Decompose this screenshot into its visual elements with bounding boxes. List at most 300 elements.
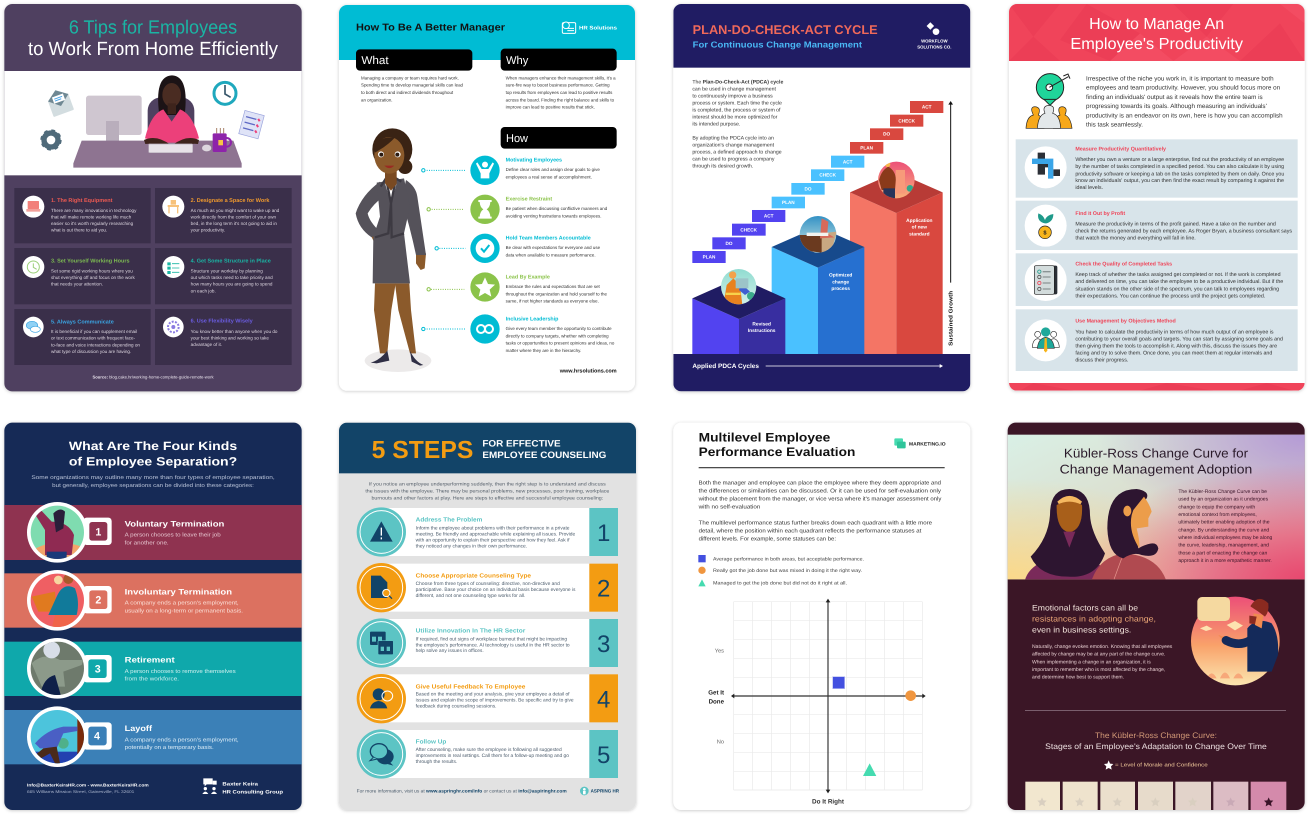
- step 2: participative. Base your choice on an individual basis because everyone is: [416, 587, 575, 592]
- band: Layoff: potentially on a temporary basis.: [125, 744, 214, 750]
- card: Use Management by Objectives Method: discuss their progress.: [1075, 357, 1128, 363]
- logo: Baxter Keira: Baxter Keira: [222, 781, 258, 787]
- title: [699, 430, 855, 459]
- card: Use Management by Objectives Method: facing and try to solve them. Once done, you can meet them at regular intervals and: [1075, 350, 1272, 356]
- staircase: PDCA cycles: CHECK: [819, 172, 836, 178]
- intro text: employees and team productivity. However, you should focus more on: [1086, 84, 1280, 91]
- band: Retirement: [4, 638, 302, 699]
- title: Multilevel Employee: [699, 430, 830, 444]
- hero text: those a part of enacting the change can: [1178, 550, 1267, 556]
- logo: Marketing.io: MARKETING.IO: [909, 441, 946, 447]
- logo: Workflow Solutions Co.: SOLUTIONS CO.: [917, 45, 951, 50]
- card: Use Management by Objectives Method: Use Management by Objectives Method: [1075, 318, 1176, 324]
- title: Change Management Adoption: [1060, 462, 1252, 476]
- tip panel 3: Set some rigid working hours where you: [51, 268, 133, 273]
- logo: Workflow Solutions Co.: WORKFLOW: [921, 38, 948, 43]
- item: Lead By Example: same, if not higher standards as everyone else.: [506, 299, 599, 304]
- tip panel 1: easier so it's worth regularly researching: [51, 221, 133, 226]
- step 1: Inform the employee about problems with their performance in a private: [416, 525, 570, 531]
- step 1: they noticed any changes in their own performance.: [416, 543, 527, 549]
- band: Layoff: Layoff: [125, 724, 152, 733]
- header band: [339, 423, 636, 473]
- item: Exercise Restraint: avoiding venting frustrations towards employees.: [506, 213, 602, 218]
- hero text: The Kübler-Ross Change Curve can be: [1178, 489, 1267, 494]
- hero text: approach it in a more empathetic manner.: [1178, 558, 1272, 563]
- legend: Managed to get the job done but did not do it right at all.: [713, 580, 847, 586]
- intro: [365, 482, 609, 501]
- title: Kübler-Ross Change Curve for: [1064, 447, 1248, 461]
- item: Motivating Employees: Motivating Employees: [506, 157, 562, 163]
- title: [69, 439, 237, 468]
- heading: Why: [501, 49, 617, 71]
- title: For Continuous Change Management: [693, 40, 862, 50]
- logo: Aspring HR: [580, 787, 619, 795]
- staircase: PDCA cycles: CHECK: [898, 118, 915, 123]
- tip panel 4: how many hours you are going to spend: [191, 282, 272, 287]
- connector start rings: [422, 169, 438, 331]
- axis: Applied PDCA Cycles: [692, 363, 943, 370]
- step 5: through the results.: [416, 759, 457, 764]
- title: PLAN-DO-CHECK-ACT CYCLE: [693, 23, 878, 37]
- step 3: If required, find out signs of workplace burnout that might be impacting: [416, 636, 567, 642]
- band: Involuntary Termination: A company ends a person's employment,: [125, 600, 239, 606]
- intro: burnouts and other factors at play. Here are steps to effective and successful employee counseling:: [371, 496, 603, 501]
- band: Retirement: from the workforce.: [125, 676, 179, 682]
- text: emotional factors: [1032, 644, 1172, 680]
- tip panel 5: 5. Always Communicate: [51, 319, 114, 325]
- intro text: finding an individuals' output as it reveals how the entire team is: [1086, 93, 1263, 100]
- intro text: [1086, 75, 1283, 128]
- text: emotional factors: important to remember who is most affected by the change,: [1032, 667, 1165, 672]
- panel: How to Manage an Employee's Productivity: [1009, 4, 1305, 391]
- step 4: Based on the meeting and your analysis, give your employee a detail of: [416, 692, 570, 697]
- item: Inclusive Leadership: tasks or opportunities to present opinions and ideas, no: [506, 341, 614, 346]
- text: why: sure-fire way to boost business performance. Getting: [506, 83, 610, 88]
- tip panel 2: As much as you might want to wake up and: [191, 208, 279, 213]
- band: Voluntary Termination: A person chooses to leave their job: [125, 532, 221, 538]
- pillar 1: [692, 278, 785, 354]
- band: Retirement: Retirement: [125, 656, 175, 665]
- panel: Kubler-Ross Change Curve: [1008, 423, 1305, 812]
- gradient hero background: [1008, 435, 1305, 579]
- chart: performance quadrant: Get It: [708, 689, 724, 696]
- item: Inclusive Leadership: [470, 314, 614, 353]
- card: Find it Out by Profit: $: [1043, 229, 1047, 236]
- logo: Marketing.io: [894, 438, 946, 448]
- hero text: used by an organization as it undergoes: [1178, 496, 1268, 502]
- step 2: 2: [597, 575, 610, 602]
- text: emotional factors: and determine how best to support them.: [1032, 674, 1124, 680]
- step 5: [357, 729, 618, 779]
- title: [1060, 447, 1252, 476]
- tip panel 6: 6. Use Flexibility Wisely: [191, 318, 253, 324]
- intro text: interest should be more optimized for: [692, 114, 777, 120]
- band: Voluntary Termination: Voluntary Termination: [125, 519, 224, 528]
- intro: If you notice an employee underperforming suddenly, then the right step is to understand and discuss: [369, 482, 606, 487]
- pillar 2: [772, 227, 864, 354]
- band: Retirement: A person chooses to remove themselves: [125, 668, 236, 674]
- tip panel 2: bed, in the long term it's not going to aid in: [191, 221, 277, 226]
- hero text: ultimately better enabling adoption of the: [1178, 519, 1270, 525]
- band: Layoff: 4: [94, 730, 100, 742]
- step 2: [357, 563, 618, 612]
- pillar 1: Revised: [752, 321, 771, 327]
- axis: Sustained Growth: Sustained Growth: [948, 291, 954, 346]
- legend: Average performance in both areas, but acceptable performance.: [713, 556, 864, 562]
- card: Check the Quality of Completed Tasks: and delivered on time, you can take the employee to be a productive individual. But if the: [1075, 279, 1283, 284]
- band: Voluntary Termination: for another one.: [125, 539, 169, 546]
- band: Voluntary Termination: [4, 502, 302, 563]
- card: Find it Out by Profit: Find it Out by Profit: [1075, 211, 1125, 216]
- title: [372, 436, 606, 463]
- band: Involuntary Termination: [4, 570, 302, 631]
- band: Layoff: A company ends a person's employment,: [125, 736, 239, 743]
- panel: How To Be A Better Manager: [339, 5, 635, 391]
- title: What Are The Four Kinds: [69, 439, 237, 453]
- step 2: different, and not one counseling type works for all.: [416, 593, 525, 598]
- item: Motivating Employees: [470, 156, 600, 185]
- tip panel 1: There are many innovations in technology: [51, 208, 136, 213]
- item: Hold Team Members Accountable: Be clear with expectations for everyone and use: [506, 245, 600, 250]
- logo: Baxter Keira: HR Consulting Group: [222, 789, 283, 795]
- title: to Work From Home Efficiently: [28, 38, 278, 59]
- step 2: Choose from three types of counseling: directive, non-directive and: [416, 581, 560, 586]
- staircase: PDCA cycles: CHECK: [740, 227, 757, 232]
- intro text: productivity is an endeavor on its own, here is how you can accomplish: [1086, 112, 1283, 119]
- tip panel 5: or text communication with frequent face-: [51, 336, 135, 341]
- card: Measure Productivity Quantitatively: productivity software or keeping a tab on the tasks completed by them on daily. Once you: [1075, 171, 1284, 177]
- step 5: After counseling, make sure the employee is following all suggested: [416, 747, 562, 752]
- title: EMPLOYEE COUNSELING: [482, 450, 606, 460]
- intro text: process or system. Each time the cycle: [692, 100, 782, 106]
- card: Measure Productivity Quantitatively: Whether you own a venture or a large enterprise, find out the productivity of an employee: [1075, 157, 1284, 162]
- pillar 2: change: [832, 279, 849, 285]
- text: emotional factors: Naturally, change evokes emotion. Knowing that all employees: [1032, 644, 1172, 649]
- heading: emotional factors: even in business settings.: [1032, 625, 1131, 634]
- intro text: through its desired growth.: [692, 163, 753, 169]
- staircase: PDCA cycles: [692, 101, 943, 263]
- staircase: PDCA cycles: DO: [883, 131, 890, 137]
- band: Involuntary Termination: Involuntary Termination: [125, 588, 232, 597]
- text: what: [361, 75, 463, 102]
- subtitle: Some organizations may outline many more than four types of employee separation,: [31, 475, 275, 480]
- illustration: woman working at desk: [4, 71, 302, 175]
- text: why: across the board. Finding the right balance and skills to: [506, 97, 614, 102]
- logo: Workflow Solutions Co.: [917, 22, 951, 50]
- body text: different levels. For example, some statuses can be:: [699, 535, 836, 542]
- chart: performance quadrant: Yes: [715, 648, 724, 654]
- intro text: its intended purpose.: [692, 121, 740, 127]
- item: Inclusive Leadership: matter where they are in the hierarchy.: [506, 348, 581, 353]
- item: Exercise Restraint: Exercise Restraint: [506, 196, 552, 202]
- heading: emotional factors: Emotional factors can all be: [1032, 603, 1138, 612]
- logo: HR Solutions: [562, 22, 617, 33]
- tip panel 5: It is beneficial if you can supplement email: [51, 329, 137, 334]
- title: Performance Evaluation: [699, 445, 855, 459]
- tip panel 6: your best thinking and working so take: [191, 336, 269, 341]
- item: Inclusive Leadership: Inclusive Leadership: [506, 316, 559, 322]
- card: Measure Productivity Quantitatively: by the number of tasks completed in a specified period. You can also calculate it by using: [1075, 164, 1284, 169]
- text: what: Managing a company or team requires hard work.: [361, 75, 459, 80]
- legend: Really got the job done but was mixed in doing it the right way.: [713, 568, 862, 573]
- legend: star: = Level of Morale and Confidence: [1115, 762, 1208, 768]
- card: Check the Quality of Completed Tasks: [1016, 253, 1298, 306]
- tip panel 4: out which tasks need to take priority and: [191, 275, 273, 280]
- footer contact: [27, 783, 149, 794]
- step 4: feedback during counseling sessions.: [416, 704, 497, 709]
- heading: emotional factors: resistances in adopting change,: [1032, 614, 1156, 623]
- chart: performance quadrant: Do It Right: [812, 798, 844, 805]
- step 1: meeting. Be friendly and approachable while explaining all issues. Provide: [416, 531, 575, 537]
- card: Check the Quality of Completed Tasks: their expectations. You can continue the process until the project gets completed.: [1075, 293, 1265, 299]
- panel: 5 Steps for Effective Employee Counseling: [339, 423, 636, 810]
- stage cards: [1025, 782, 1286, 812]
- card: Find it Out by Profit: that watch the money and everything will fall in line.: [1075, 235, 1196, 241]
- staircase: PDCA cycles: PLAN: [703, 254, 715, 260]
- intro: the issues with the employee. There may be personal problems, new processes, poor training, workplace: [365, 489, 609, 494]
- heading: How: How: [506, 132, 528, 145]
- footer contact: For more information, visit us at www.aspringhr.com/info or contact us at info@aspiringhr.com: [357, 788, 567, 794]
- band: Involuntary Termination: 2: [95, 594, 101, 606]
- item: Motivating Employees: Define clear roles and assign clear goals to give: [506, 167, 600, 172]
- panel: Plan-Do-Check-Act Cycle: [673, 4, 970, 391]
- tip panel 6: [155, 309, 292, 365]
- card: Check the Quality of Completed Tasks: Check the Quality of Completed Tasks: [1075, 261, 1172, 267]
- tip panel 2: 2. Designate a Space for Work: [191, 197, 270, 203]
- tip panel 6: advantage of it.: [191, 342, 222, 347]
- item: Hold Team Members Accountable: data when available to measure performance.: [506, 252, 596, 257]
- title: Employee's Productivity: [1070, 35, 1243, 53]
- heading: stages: [1045, 731, 1267, 751]
- panel: 6 Tips for Employees: [4, 4, 302, 391]
- tip panel 2: [155, 188, 292, 243]
- body text: the differences or similarities can be discussed. Or it can be used for self-evaluation only: [699, 487, 941, 494]
- text: why: When managers enhance their management skills, it's a: [506, 75, 616, 80]
- band: Voluntary Termination: 1: [95, 526, 101, 538]
- intro text: is completed, the process or system of: [692, 107, 781, 113]
- intro text: Irrespective of the niche you work in, it is important to measure both: [1086, 75, 1274, 82]
- tip panel 5: [14, 309, 151, 365]
- legend: star: [1104, 760, 1208, 770]
- step 5: improvements in real settings. Call them for a follow-up meeting and go: [416, 753, 569, 758]
- footer contact: 665 Williams Mission Street, Gainesville, FL 32601: [27, 789, 134, 794]
- card: Measure Productivity Quantitatively: Measure Productivity Quantitatively: [1075, 146, 1166, 152]
- pillar 2: Optimized: [829, 273, 852, 278]
- band: Involuntary Termination: usually on a long-term or permanent basis.: [125, 607, 243, 614]
- heading: What: What: [361, 54, 389, 67]
- heading: Why: Why: [506, 54, 528, 67]
- step 5: 5: [597, 742, 610, 768]
- step 3: the employee's performance. AI technology is useful in the HR sector to: [416, 642, 570, 648]
- staircase: PDCA cycles: PLAN: [782, 200, 795, 205]
- item: Lead By Example: [470, 272, 607, 304]
- step 1: Address The Problem: [416, 516, 482, 523]
- hero text: emotional context from employees,: [1178, 512, 1257, 517]
- card: Measure Productivity Quantitatively: ideal levels.: [1075, 185, 1103, 190]
- tip panel 2: work directly from the comfort of your own: [190, 214, 276, 219]
- heading: stages: The Kübler-Ross Change Curve:: [1095, 731, 1217, 740]
- staircase: PDCA cycles: ACT: [843, 159, 853, 164]
- tip panel 2: your productivity.: [191, 228, 225, 233]
- step 3: help solve any issues in offices.: [416, 648, 484, 653]
- card: Find it Out by Profit: Measure the productivity in terms of the profit gained. Have a take on the number and: [1075, 221, 1276, 227]
- card: Use Management by Objectives Method: contributing to your overall goals and targets. You can start by assigning some goals and: [1075, 336, 1283, 342]
- body text: Both the manager and employee can place the employee where they deem appropriate and: [699, 479, 941, 486]
- illustration: man presenting: [1191, 597, 1280, 685]
- subtitle: but generally, employee separations can be divided into these categories:: [52, 483, 254, 488]
- hero text: [1178, 489, 1272, 563]
- body text: The multilevel performance status further breaks down each quadrant with a little more: [699, 519, 932, 526]
- illustration: two women: [1025, 489, 1166, 580]
- text: why: improve can lead to positive results that stick.: [506, 105, 595, 110]
- card: Measure Productivity Quantitatively: know an individuals' output, you can then find the exact result by comparing it against the: [1075, 178, 1284, 183]
- card: Find it Out by Profit: [1016, 201, 1298, 250]
- panel: Four Kinds of Employee Separation: [4, 423, 302, 810]
- pillar 3: [850, 172, 943, 354]
- tip panel 3: 3. Set Yourself Working Hours: [51, 258, 130, 264]
- item: Exercise Restraint: [470, 195, 607, 224]
- header band with low-poly pattern: [1009, 4, 1305, 391]
- step 5: Follow Up: [416, 738, 446, 745]
- body text: with no self-evaluation: [698, 503, 760, 510]
- tip panel 4: [155, 248, 292, 304]
- item: Inclusive Leadership: directly to company targets, whether with completing: [506, 333, 609, 338]
- tip panel 1: what is out there to aid you.: [51, 228, 107, 233]
- tip panel 5: to-face and voice interactions depending on: [51, 342, 140, 347]
- card: Check the Quality of Completed Tasks: situation stands on the other side of the spectrum, you can talk to employees regarding: [1075, 286, 1279, 292]
- step 3: 3: [597, 631, 610, 657]
- header band: [673, 4, 970, 68]
- tip panel 5: what type of discussion you are having.: [51, 349, 131, 354]
- tip panel 4: Structure your workday by planning: [191, 268, 263, 273]
- axis: Sustained Growth: [948, 101, 954, 346]
- intro text: this task seamlessly.: [1086, 121, 1143, 128]
- tip panel 1: that will make remote working life much: [51, 214, 131, 219]
- axis: Applied PDCA Cycles: Applied PDCA Cycles: [692, 363, 759, 370]
- intro text: [692, 79, 783, 169]
- card: Use Management by Objectives Method: then giving them the tools to accomplish it. Along with this, discuss the issues they are: [1075, 343, 1277, 349]
- title: [28, 16, 278, 59]
- step 2: Choose Appropriate Counseling Type: [416, 572, 531, 579]
- intro text: process, a defined approach to change: [692, 149, 782, 155]
- title: FOR EFFECTIVE: [482, 438, 561, 449]
- title: [1070, 15, 1243, 53]
- illustration: planner on hill: [798, 215, 838, 254]
- title: 6 Tips for Employees: [69, 16, 237, 38]
- tip panel 3: [14, 248, 151, 304]
- step 4: 4: [597, 686, 610, 713]
- text: what: to both direct and indirect dividends throughout: [361, 90, 453, 95]
- logo: Baxter Keira: [202, 778, 283, 795]
- hero text: change. By understanding the curve and: [1178, 527, 1269, 533]
- tip panel 4: 4. Get Some Structure in Place: [191, 258, 271, 264]
- text: emotional factors: affected by change may be at any part of the change curve.: [1032, 651, 1165, 657]
- staircase: PDCA cycles: PLAN: [860, 145, 873, 150]
- hero text: change to equip the company with: [1178, 504, 1255, 510]
- title: of Employee Separation?: [69, 455, 237, 468]
- logo: Aspring HR: ASPRING HR: [591, 788, 619, 794]
- pillar 3: Application: [906, 218, 932, 223]
- card: Check the Quality of Completed Tasks: Keep track of whether the tasks assigned get completed or not. If the work is completed: [1075, 272, 1281, 277]
- hero text: where individual employees may be along: [1178, 535, 1272, 540]
- tip panel 1: 1. The Right Equipment: [51, 197, 113, 203]
- text: why: top results from employees can lead to positive results: [506, 90, 612, 95]
- step 3: [357, 618, 618, 668]
- item: Lead By Example: throughout the organization and hold yourself to the: [506, 291, 607, 296]
- website: www.hrsolutions.com: [559, 368, 617, 374]
- intro text: The Plan-Do-Check-Act (PDCA) cycle: [692, 79, 783, 85]
- icon: target over people: [1026, 74, 1072, 128]
- logo: HR Solutions: HR Solutions: [579, 25, 617, 31]
- tip panel 4: on each job.: [191, 288, 216, 293]
- step 3: Utilize Innovation In The HR Sector: [416, 627, 525, 634]
- intro text: can be used in change management: [692, 86, 776, 92]
- chart: performance quadrant: [708, 599, 926, 805]
- body text: without the placement from the manager, or vice versa where it's manager assessment only: [698, 495, 942, 502]
- legend: [698, 555, 864, 586]
- intro text: progressing towards its goals. Although measuring an individuals': [1086, 102, 1267, 109]
- intro text: By adopting the PDCA cycle into an: [692, 135, 774, 141]
- card: Use Management by Objectives Method: You have to calculate the productivity in terms of how much output of an employee is: [1075, 329, 1274, 335]
- tip panel 3: that needs your attention.: [51, 282, 103, 287]
- text: what: an organization.: [361, 97, 393, 102]
- step 4: [357, 674, 618, 723]
- pillar 3: of new: [912, 225, 927, 230]
- tip panel 1: [14, 188, 151, 243]
- subtitle: [31, 475, 275, 488]
- body text: detail, where the position within each quadrant reflects the performance statuses at: [699, 527, 921, 534]
- step 1: [357, 507, 618, 557]
- intro text: organization's change management: [692, 142, 774, 148]
- step 4: Give Useful Feedback To Employee: [416, 683, 525, 690]
- chart: performance quadrant: Done: [709, 698, 724, 705]
- item: Lead By Example: Embrace the rules and expectations that are set: [506, 284, 600, 289]
- step 1: 1: [597, 520, 610, 546]
- staircase: PDCA cycles: ACT: [764, 213, 774, 219]
- staircase: PDCA cycles: DO: [804, 186, 812, 191]
- title: 5 STEPS: [372, 436, 473, 463]
- footer contact: Info@BaxterKeiraHR.com - www.BaxterKeiraHR.com: [27, 783, 149, 788]
- heading: How: [501, 127, 617, 149]
- item: Inclusive Leadership: Give every team member the opportunity to contribute: [506, 326, 612, 331]
- text: emotional factors: When implementing a change in an organization, it is: [1032, 659, 1151, 665]
- footer band: [673, 354, 970, 391]
- item: Motivating Employees: employees a real sense of accomplishment.: [506, 174, 592, 179]
- item: Lead By Example: Lead By Example: [506, 274, 550, 280]
- hero text: the curve, leadership, management, and: [1178, 542, 1269, 548]
- item: Hold Team Members Accountable: Hold Team Members Accountable: [506, 235, 591, 241]
- item: Exercise Restraint: Be patient when discussing conflictive manners and: [506, 206, 607, 211]
- card: Use Management by Objectives Method: [1016, 309, 1298, 371]
- heading: stages: Stages of an Employee's Adaptation to Change Over Time: [1045, 742, 1267, 751]
- illustration: businesswoman: [356, 128, 431, 372]
- card: Find it Out by Profit: check the returns generated by each employee. As Roger Bryan, a business consultant says: [1075, 228, 1292, 234]
- pillar 2: process: [831, 286, 850, 291]
- staircase: PDCA cycles: DO: [725, 241, 733, 246]
- header band: [339, 5, 635, 60]
- pillar 1: Instructions: [748, 328, 775, 333]
- band: Layoff: [4, 706, 302, 767]
- chart: performance quadrant: No: [717, 738, 724, 745]
- source: Source: blog.cake.hr/working-home-complete-guide-remote-work: [92, 375, 214, 380]
- title: [693, 23, 878, 50]
- panel: Multilevel Employee Performance Evaluation: [673, 423, 970, 810]
- band: Retirement: 3: [95, 663, 101, 675]
- illustration: engineer at site: [877, 161, 916, 199]
- connector dots: [427, 170, 465, 329]
- illustration: worker with plans: [720, 268, 758, 305]
- intro text: to continuously improve a business: [692, 93, 773, 99]
